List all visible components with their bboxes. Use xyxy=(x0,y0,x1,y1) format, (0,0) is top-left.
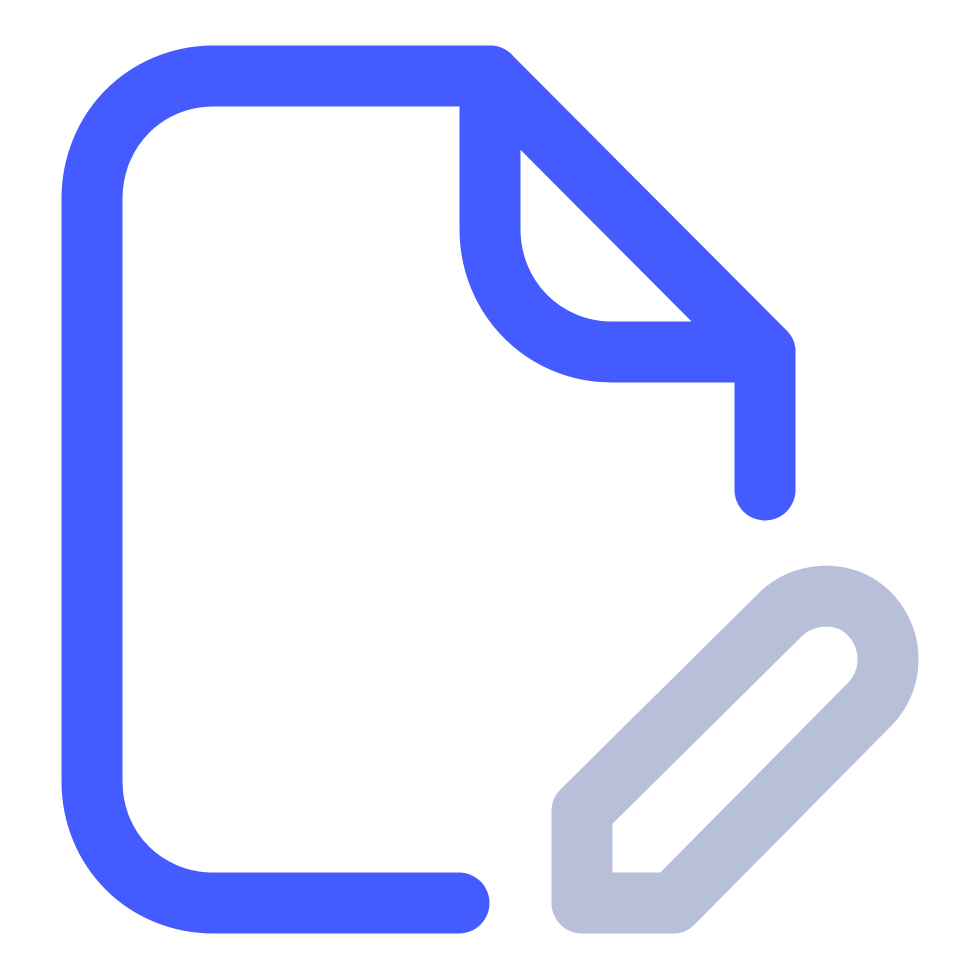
icon: pencil xyxy=(582,596,888,903)
icon: document outline with folded corner xyxy=(92,76,765,903)
